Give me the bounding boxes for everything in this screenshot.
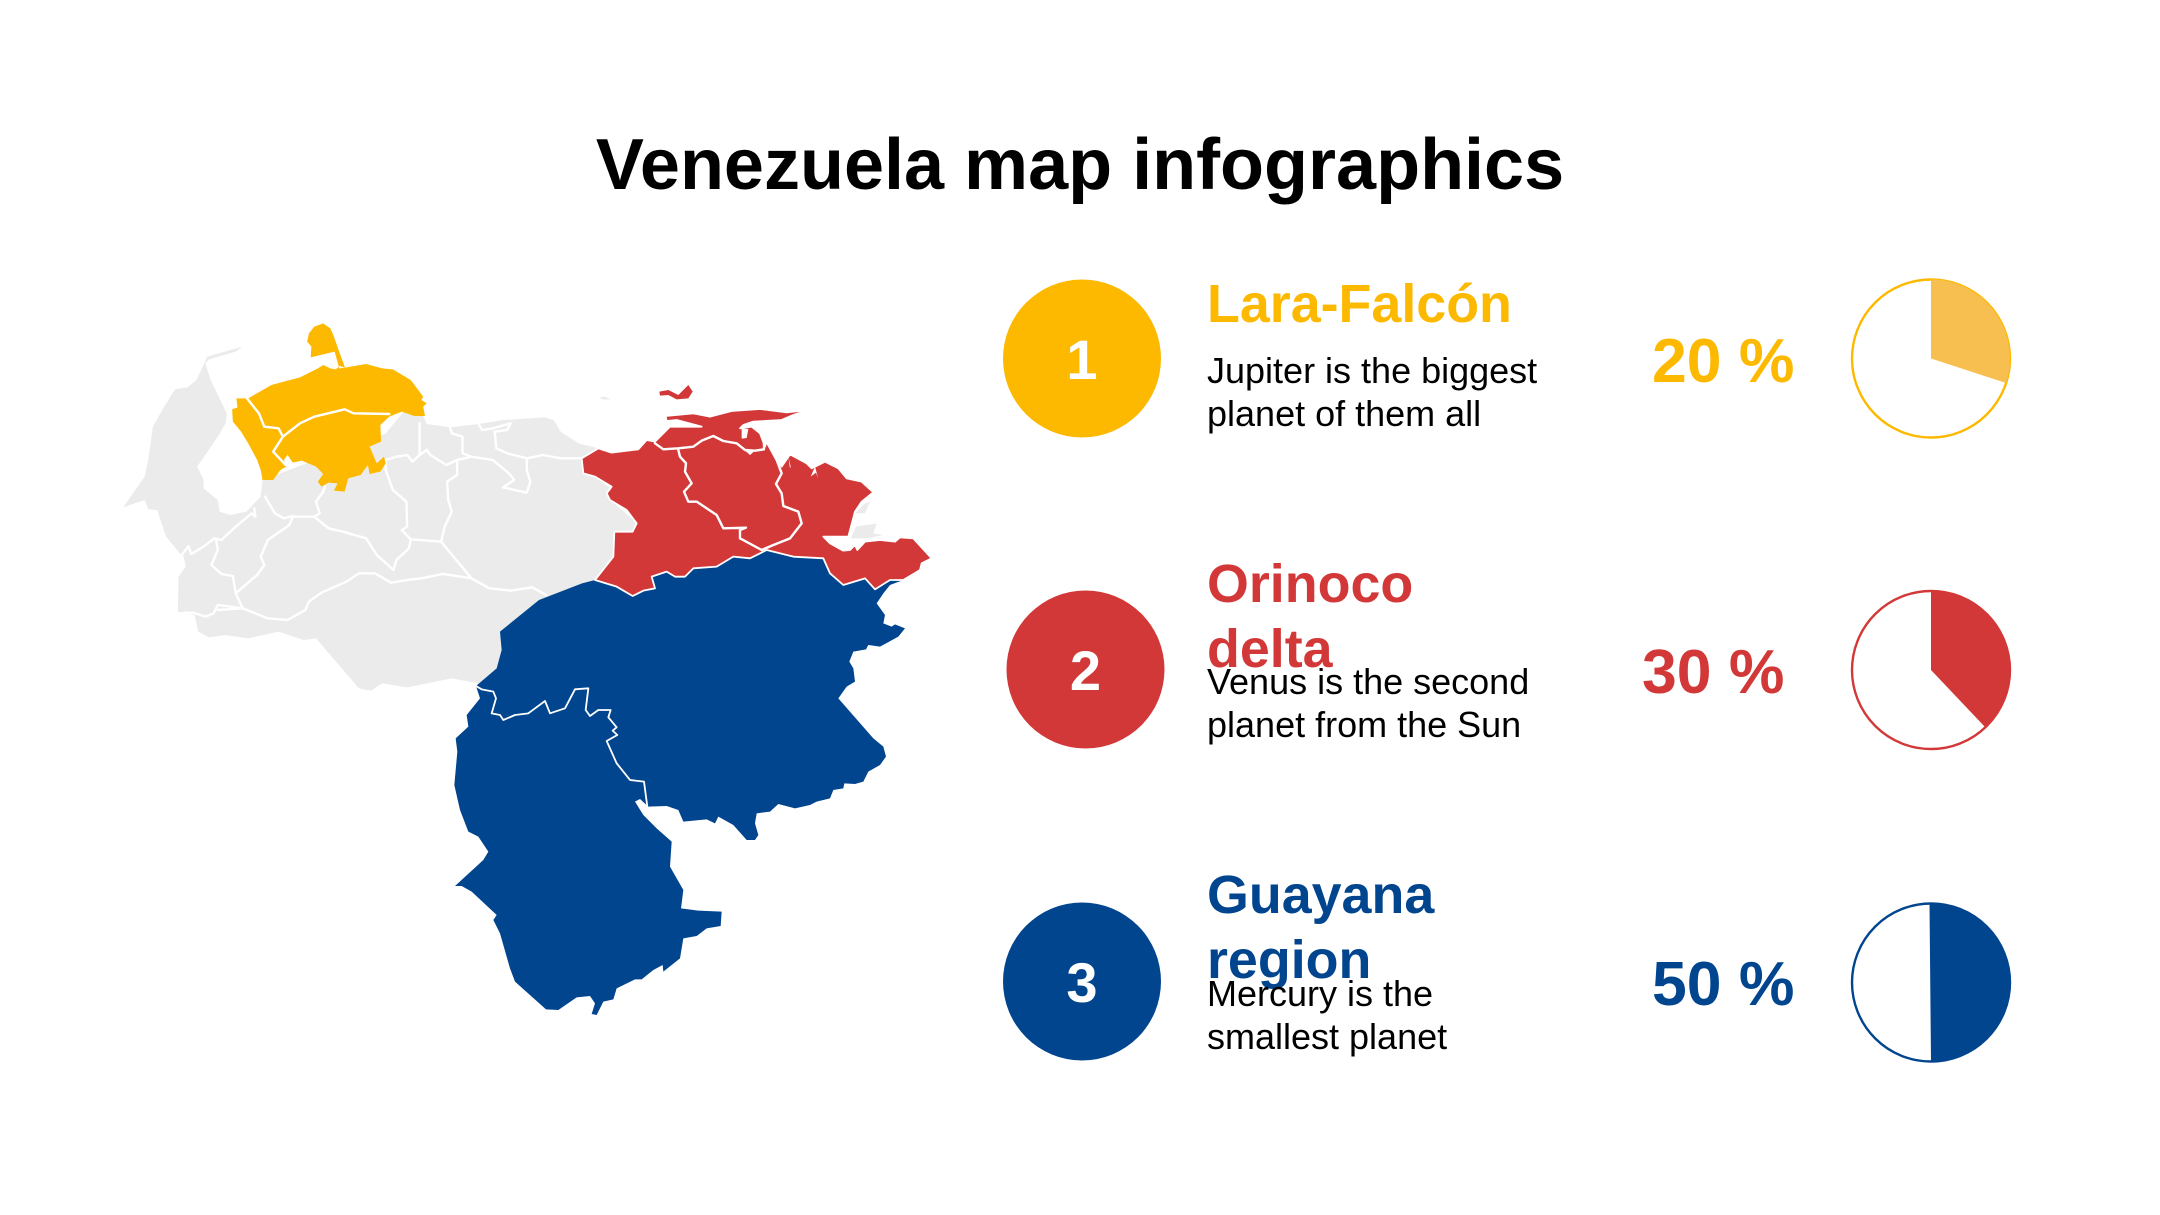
description 3: smallest planet [1207,1016,1447,1057]
region: other states (grey) [123,347,636,691]
region: Lara-Falcon (yellow) [232,323,427,492]
region: Orinoco delta (red) [582,385,932,596]
heading: Guayana region: Guayana [1207,865,1435,925]
heading: Lara-Falcon: Lara-Falcón [1207,274,1512,334]
number badge 2: 2 [1070,639,1101,702]
map of Venezuela [123,323,932,1015]
value 50 %: 50 % [1652,949,1794,1019]
description 2: Venus is the second [1207,661,1529,702]
row 2: Orinoco delta [1006,554,2010,749]
pie chart 30 % [1852,591,2010,749]
heading: Orinoco delta: Orinoco [1207,554,1413,614]
pie chart 50 % [1852,903,2010,1062]
description 1: planet of them all [1207,393,1481,434]
number badge 3: 3 [1066,951,1098,1014]
number badge 2 [1006,590,1164,748]
heading: Guayana region: region [1207,930,1371,990]
heading: Orinoco delta: delta [1207,619,1334,679]
row 3: Guayana region [1003,865,2010,1062]
number badge 3 [1003,902,1161,1060]
description 2: planet from the Sun [1207,704,1521,745]
row 1: Lara-Falcon [1003,274,2010,438]
title: Venezuela map infographics [596,125,1564,205]
value 30 %: 30 % [1642,637,1784,707]
pie chart 20 % [1852,280,2010,438]
region: Guayana (blue) [454,550,905,1015]
number badge 1: 1 [1066,328,1098,391]
description 3: Mercury is the [1207,973,1433,1014]
value 20 %: 20 % [1652,326,1794,396]
number badge 1 [1003,280,1161,438]
description 1: Jupiter is the biggest [1207,350,1537,391]
